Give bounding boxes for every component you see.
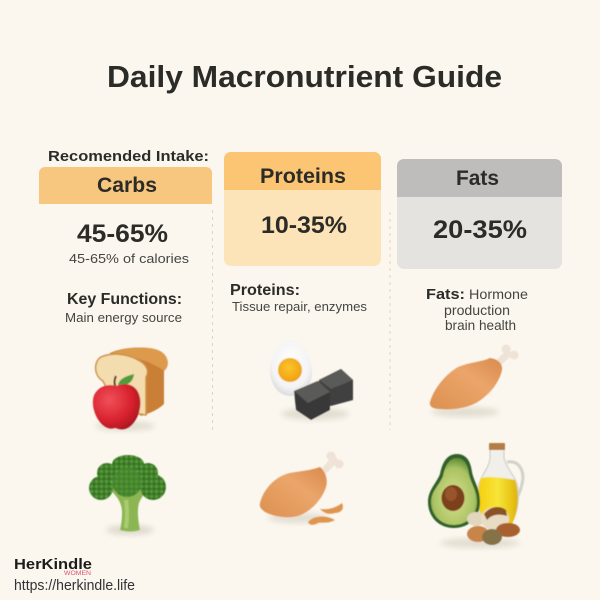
panel: carbs text: 45-65%	[77, 220, 168, 248]
recommended intake label: Recomended Intake:	[48, 148, 209, 165]
panel: fats text: production	[444, 302, 510, 318]
icon: broccoli	[89, 455, 166, 535]
panel: carbs text	[65, 220, 190, 325]
panel: proteins card: 10-35%	[261, 212, 347, 239]
icon: avocado, oil and nuts	[428, 443, 523, 548]
panel: proteins text	[230, 282, 367, 314]
panel: carbs header: Carbs	[97, 174, 157, 197]
panel: fats text: brain health	[445, 317, 516, 333]
panel: proteins text: Proteins:	[230, 282, 300, 299]
icon: bread and apple	[93, 347, 168, 431]
logo: HerKindle: HerKindle	[14, 556, 92, 573]
title: Daily Macronutrient Guide	[107, 59, 502, 94]
panel: fats text: Fats:	[426, 286, 465, 303]
icon: egg and cubes	[270, 340, 353, 420]
panel: proteins card	[224, 152, 381, 266]
panel: carbs text: Key Functions:	[67, 291, 182, 308]
logo: HerKindle: WOMEN	[64, 571, 91, 577]
panel: fats card: Fats	[456, 167, 499, 190]
panel: carbs text: 45-65% of calories	[69, 251, 190, 266]
panel: proteins text: Tissue repair, enzymes	[232, 299, 367, 314]
panel: fats card: 20-35%	[433, 216, 527, 244]
panel: fats card	[397, 159, 562, 269]
panel: carbs header	[39, 167, 212, 204]
panel: fats text: Hormone	[469, 286, 528, 302]
website url: https://herkindle.life	[14, 577, 135, 594]
panel: carbs text: Main energy source	[65, 310, 182, 325]
panel: fats text	[426, 286, 528, 333]
icon: chicken leg (fats)	[430, 344, 518, 417]
panel: proteins card: Proteins	[260, 165, 346, 188]
icon: chicken leg (proteins)	[260, 452, 344, 525]
